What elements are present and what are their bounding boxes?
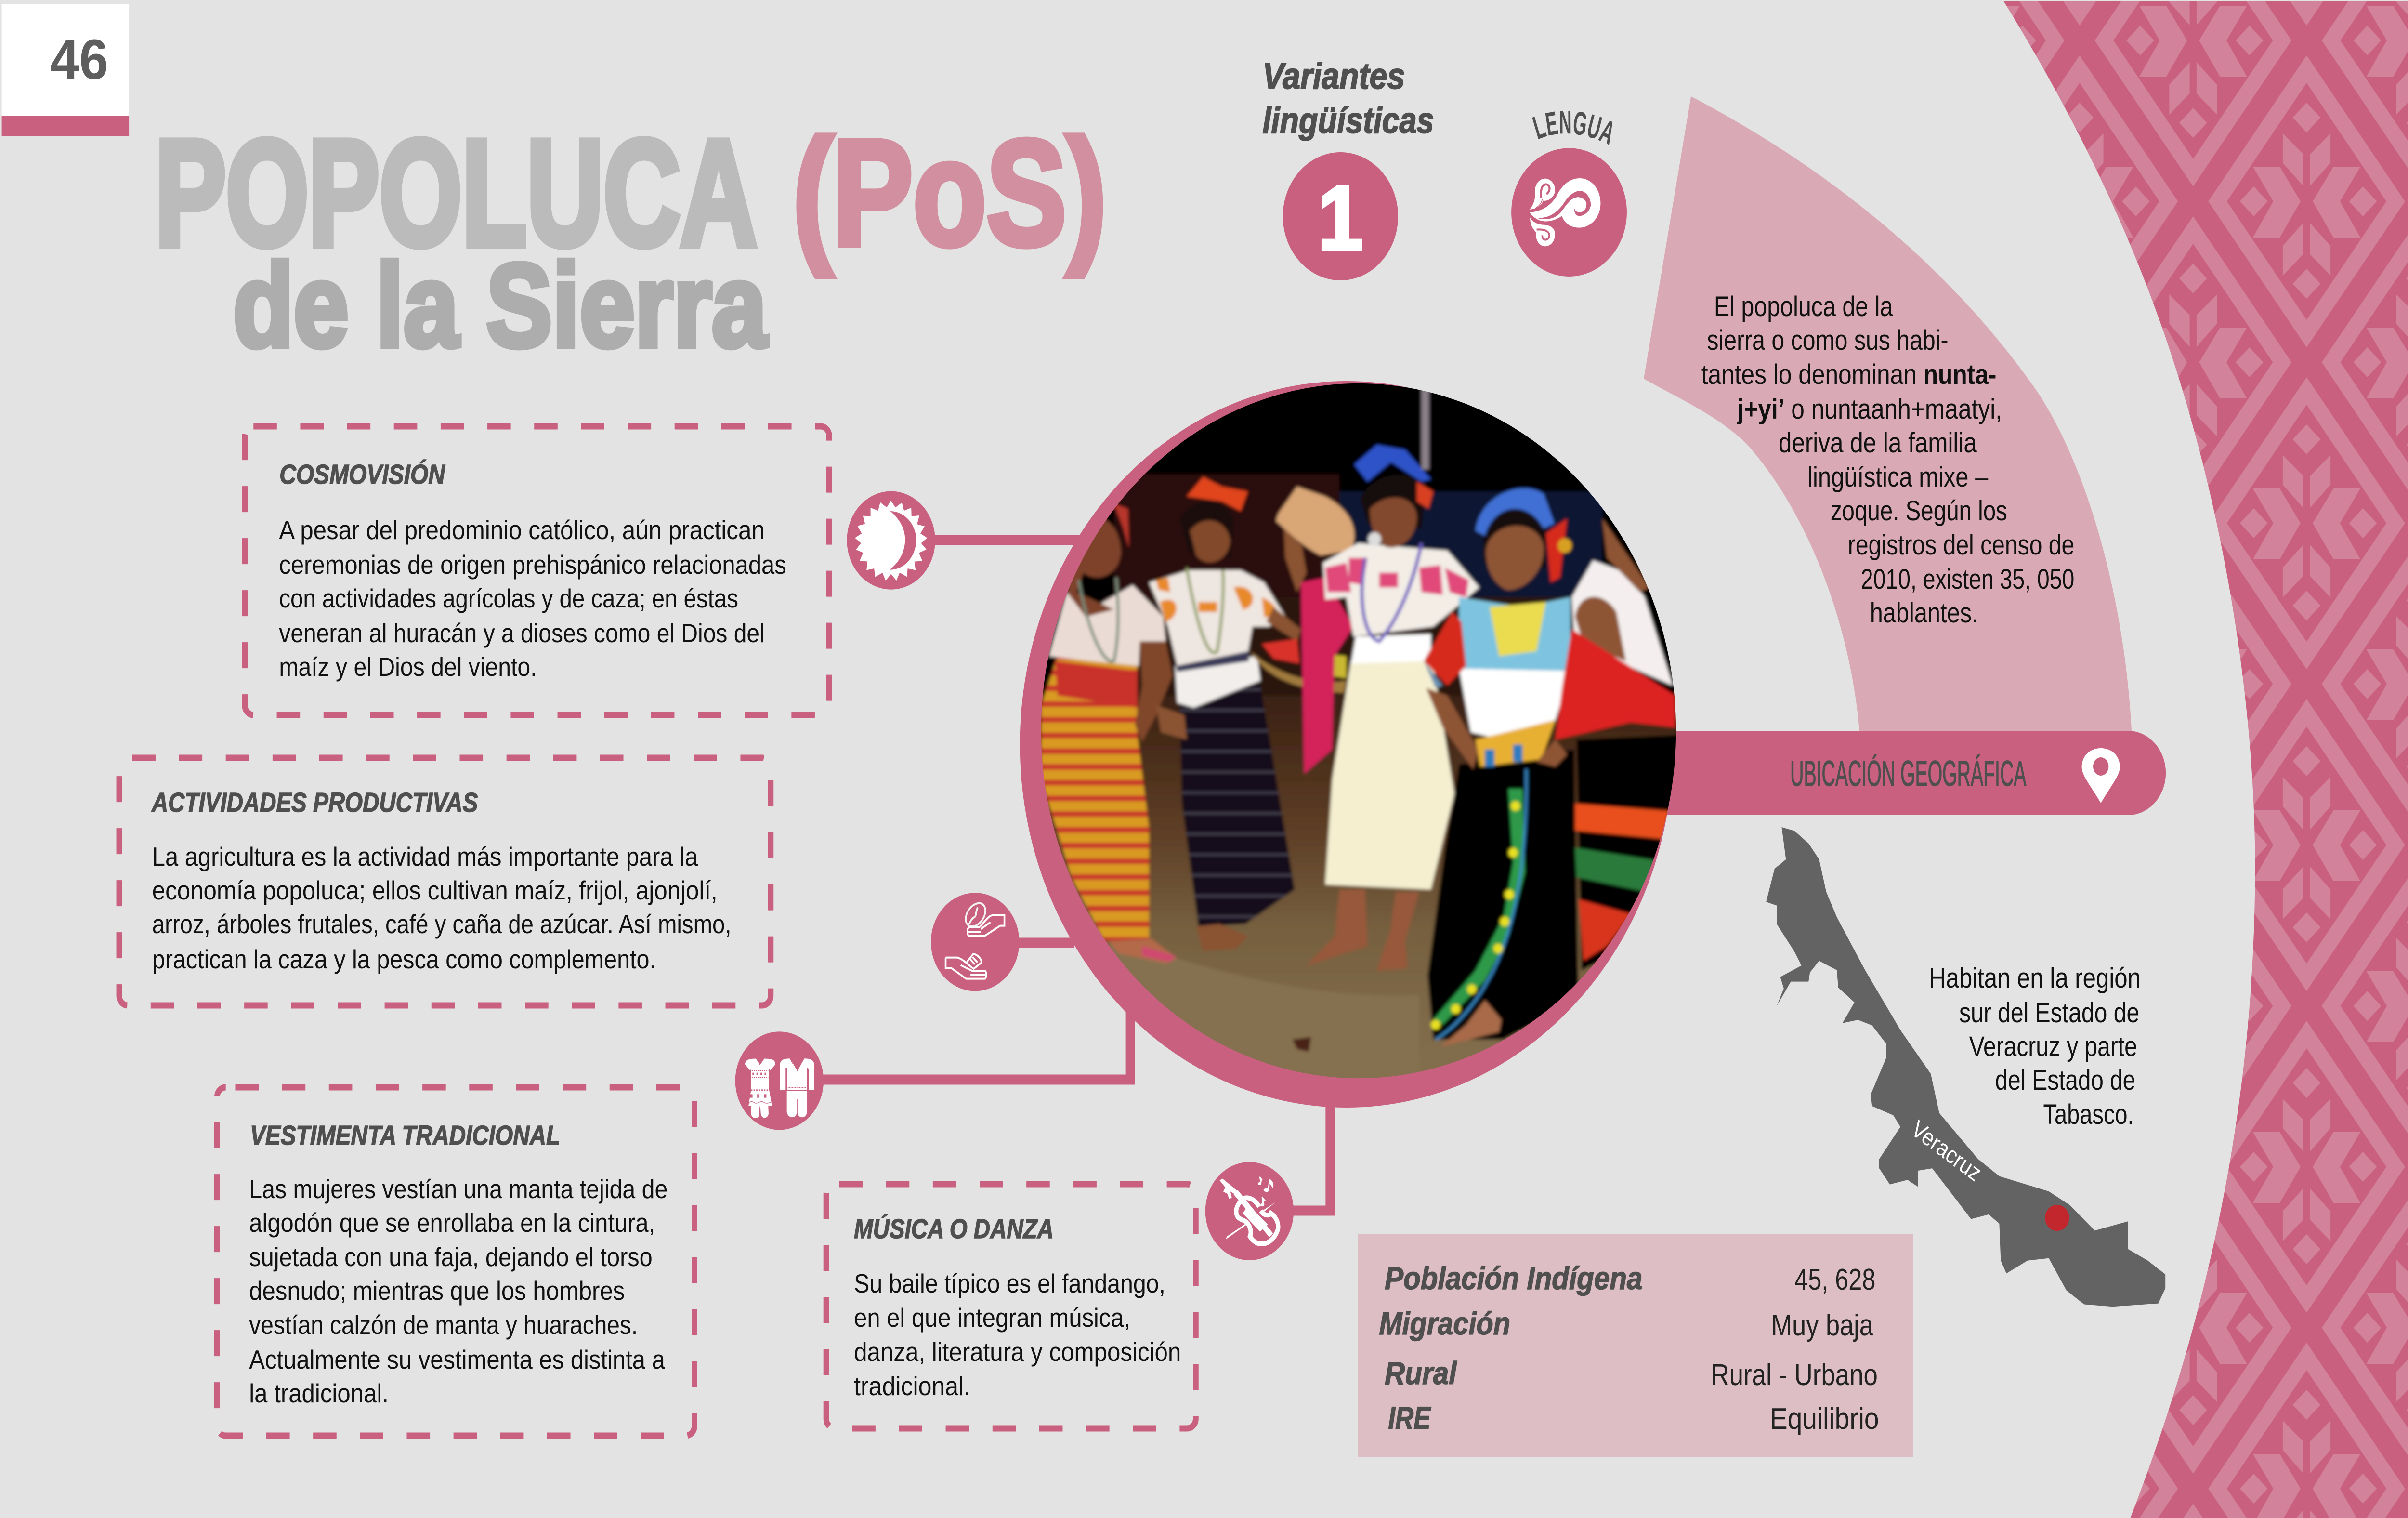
lengua bbox=[1511, 111, 1627, 277]
text block: actividades productivas: practican la caza y la pesca como complemento. bbox=[152, 945, 656, 975]
text block: cosmovisión: ceremonias de origen prehispánico relacionadas bbox=[279, 551, 786, 580]
text block: vestimenta tradicional: sujetada con una faja, dejando el torso bbox=[249, 1243, 653, 1272]
data table: Rural bbox=[1385, 1356, 1457, 1391]
text block: música o danza bbox=[854, 1269, 1181, 1401]
text block: vestimenta tradicional: Las mujeres vestían una manta tejida de bbox=[249, 1175, 667, 1204]
title: de la Sierra bbox=[233, 239, 768, 372]
panel: ubicación fan bbox=[1644, 96, 2132, 731]
heading: actividades productivas: ACTIVIDADES PRODUCTIVAS bbox=[151, 788, 478, 818]
text: lengua description: 2010, existen 35, 050 bbox=[1861, 563, 2074, 595]
text block: música o danza: Su baile típico es el fandango, bbox=[854, 1269, 1165, 1299]
text: lengua description: tantes lo denominan nunta- bbox=[1701, 358, 1996, 390]
text: lengua description bbox=[1701, 290, 2074, 629]
connector lines bbox=[821, 540, 1330, 1211]
text: región description: Tabasco. bbox=[2043, 1098, 2134, 1130]
woven pattern band bbox=[1906, 1, 2408, 1518]
icon: speech swirl bbox=[1530, 178, 1600, 246]
data table: 45, 628 bbox=[1794, 1263, 1875, 1296]
text block: vestimenta tradicional: desnudo; mientras que los hombres bbox=[249, 1277, 625, 1306]
woman 3 bbox=[1301, 578, 1353, 774]
icon: location pin bbox=[2082, 748, 2120, 803]
text block: vestimenta tradicional: la tradicional. bbox=[249, 1379, 389, 1409]
text block: actividades productivas: La agricultura es la actividad más importante para la bbox=[152, 843, 698, 872]
text block: música o danza: tradicional. bbox=[854, 1372, 970, 1401]
photo: women in traditional dress bbox=[1041, 383, 1676, 1078]
ubicación geográfica band: UBICACIÓN GEOGRÁFICA bbox=[1790, 753, 2026, 793]
icon: traditional clothing bbox=[735, 1031, 824, 1130]
label: Veracruz: Veracruz bbox=[1907, 1115, 1986, 1187]
text block: vestimenta tradicional bbox=[249, 1175, 667, 1409]
data table: IRE bbox=[1388, 1400, 1431, 1436]
icon: violin bbox=[1205, 1162, 1294, 1260]
basket bbox=[1250, 651, 1347, 693]
panel: cosmovisión bbox=[245, 426, 829, 715]
title: POPOLUCA bbox=[155, 108, 757, 277]
text: región description: del Estado de bbox=[1995, 1064, 2135, 1096]
heading: vestimenta tradicional: VESTIMENTA TRADICIONAL bbox=[250, 1121, 560, 1151]
page number tab: 46 bbox=[50, 27, 108, 91]
text block: actividades productivas: economía popoluca; ellos cultivan maíz, frijol, ajonjolí, bbox=[152, 876, 718, 906]
icon: sun and moon bbox=[847, 491, 935, 590]
text: lengua description: j+yi’ o nuntaanh+maatyi, bbox=[1737, 393, 2002, 425]
text: región description: Veracruz y parte bbox=[1969, 1030, 2137, 1062]
woman 4 bbox=[1427, 750, 1579, 1040]
variantes lingüísticas: lingüísticas bbox=[1262, 101, 1434, 141]
data table: Muy baja bbox=[1771, 1309, 1873, 1342]
text block: cosmovisión: con actividades agrícolas y de caza; en éstas bbox=[279, 584, 738, 614]
icon: hands with grain bbox=[931, 893, 1019, 991]
text block: cosmovisión: A pesar del predominio católico, aún practican bbox=[279, 516, 765, 545]
text block: cosmovisión: veneran al huracán y a dioses como el Dios del bbox=[279, 619, 765, 648]
data table bbox=[1358, 1234, 1913, 1457]
woman 1 bbox=[1041, 656, 1149, 941]
heading: música o danza: MÚSICA O DANZA bbox=[854, 1214, 1054, 1244]
text: región description: sur del Estado de bbox=[1959, 997, 2139, 1029]
data table: Equilibrio bbox=[1770, 1402, 1879, 1436]
title bbox=[155, 108, 1107, 372]
ubicación geográfica band bbox=[1603, 731, 2166, 815]
data table: Rural - Urbano bbox=[1711, 1359, 1878, 1392]
lengua: LENGUA bbox=[1532, 111, 1612, 145]
variantes lingüísticas bbox=[1262, 56, 1434, 280]
page number tab bbox=[2, 4, 129, 136]
data table: Población Indígena bbox=[1385, 1261, 1642, 1296]
text block: cosmovisión bbox=[279, 516, 786, 682]
central photo ring bbox=[1020, 381, 1673, 1108]
text block: vestimenta tradicional: vestían calzón de manta y huaraches. bbox=[249, 1311, 638, 1340]
text block: actividades productivas: arroz, árboles frutales, café y caña de azúcar. Así mismo, bbox=[152, 910, 732, 939]
text: región description bbox=[1929, 962, 2141, 1130]
text block: vestimenta tradicional: Actualmente su vestimenta es distinta a bbox=[249, 1346, 666, 1375]
text block: actividades productivas bbox=[152, 843, 732, 975]
marker: settlement region bbox=[2045, 1205, 2069, 1231]
heading: cosmovisión: COSMOVISIÓN bbox=[279, 460, 446, 490]
title: (PoS) bbox=[793, 108, 1107, 277]
text block: música o danza: danza, literatura y composición bbox=[854, 1338, 1181, 1367]
jar bbox=[1276, 487, 1354, 555]
text block: cosmovisión: maíz y el Dios del viento. bbox=[279, 653, 537, 682]
variantes lingüísticas: 1 bbox=[1318, 167, 1363, 269]
panel: vestimenta tradicional bbox=[217, 1087, 694, 1436]
text: lengua description: registros del censo de bbox=[1848, 529, 2074, 561]
text: lengua description: hablantes. bbox=[1870, 597, 1978, 629]
text: lengua description: deriva de la familia bbox=[1779, 427, 1977, 459]
data table: Migración bbox=[1379, 1306, 1510, 1342]
panel: música o danza bbox=[826, 1184, 1196, 1428]
map: Veracruz bbox=[1766, 827, 2165, 1307]
text: lengua description: zoque. Según los bbox=[1831, 495, 2007, 527]
text: lengua description: lingüística mixe – bbox=[1807, 461, 1989, 493]
woman 5 bbox=[1576, 735, 1677, 971]
text: lengua description: El popoluca de la bbox=[1714, 290, 1893, 322]
text: lengua description: sierra o como sus habi- bbox=[1707, 324, 1949, 356]
text block: vestimenta tradicional: algodón que se enrollaba en la cintura, bbox=[249, 1209, 655, 1238]
text block: música o danza: en el que integran música, bbox=[854, 1304, 1130, 1333]
panel: actividades productivas bbox=[119, 758, 771, 1005]
variantes lingüísticas: Variantes bbox=[1262, 56, 1405, 97]
text: región description: Habitan en la región bbox=[1929, 962, 2141, 994]
woman 2 bbox=[1179, 681, 1295, 926]
